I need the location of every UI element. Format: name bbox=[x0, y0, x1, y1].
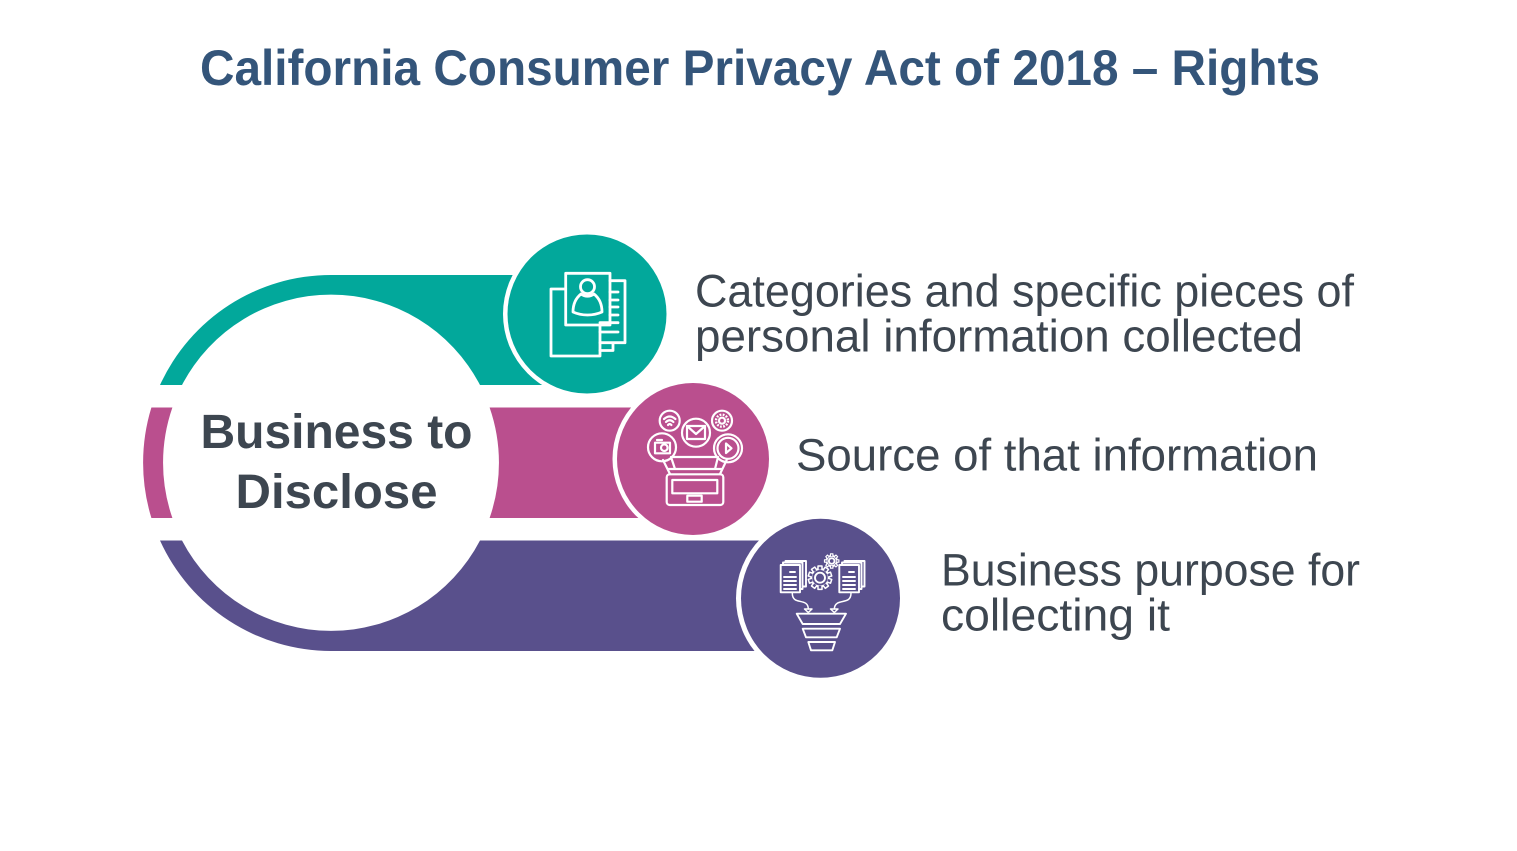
text: business purpose: collecting it bbox=[941, 590, 1171, 640]
text: business purpose: Business purpose for bbox=[941, 544, 1360, 596]
icon: documents, gears and funnel bbox=[736, 514, 905, 683]
text: categories and specific pieces: Categories and specific pieces of bbox=[695, 266, 1354, 316]
text: categories and specific pieces bbox=[695, 266, 1354, 362]
text: source of that information: Source of that information bbox=[796, 430, 1318, 480]
center label: Business to Disclose bbox=[200, 406, 472, 519]
icon: laptop with media sources bbox=[612, 378, 774, 540]
text: categories and specific pieces: personal information collected bbox=[695, 310, 1303, 362]
band: purple bbox=[160, 540, 790, 651]
title: California Consumer Privacy Act of 2018 – Rights bbox=[200, 40, 1320, 96]
center label: Business to Disclose: Business to bbox=[200, 406, 472, 459]
center label: Business to Disclose: Disclose bbox=[236, 466, 438, 519]
text: business purpose bbox=[941, 544, 1360, 640]
band: pink bbox=[143, 408, 660, 518]
band: teal bbox=[160, 275, 560, 385]
icon: personal information documents bbox=[503, 230, 671, 398]
